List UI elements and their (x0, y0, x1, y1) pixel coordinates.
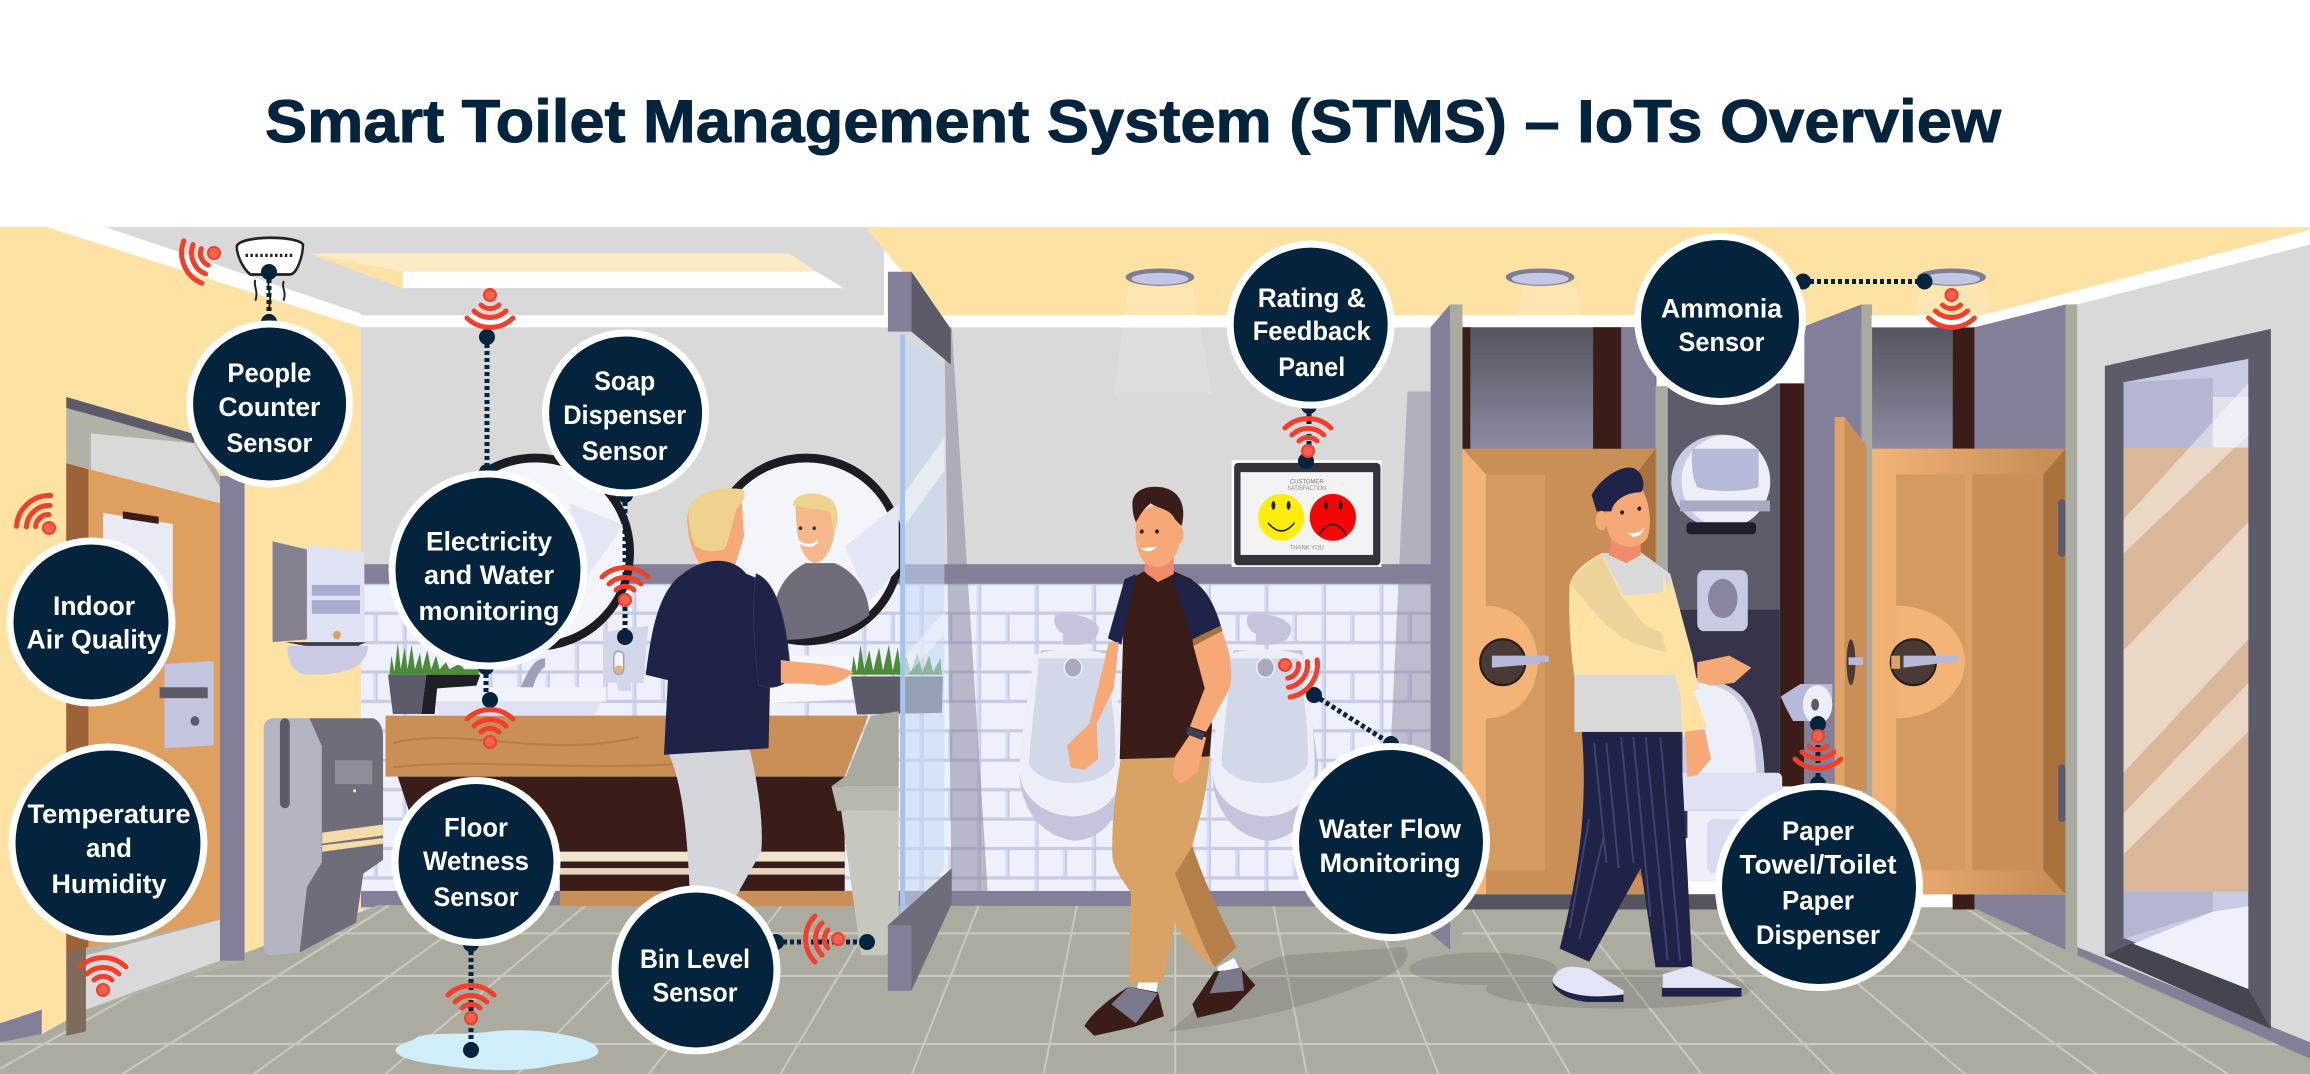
callout: people counter sensor: Sensor (226, 428, 313, 458)
callout: people counter sensor: Counter (218, 392, 321, 422)
glass exit door (2105, 329, 2271, 1029)
callout: bin level sensor: Sensor (652, 978, 738, 1008)
stall back walls (1462, 304, 2066, 950)
middle partition (1431, 304, 1462, 952)
ceiling lights (1114, 268, 2006, 408)
callout: floor wetness sensor: Wetness (423, 846, 529, 876)
counter with sinks (386, 656, 868, 906)
hand dryer bin unit (264, 718, 383, 955)
callout: temperature and humidity: Temperature (28, 799, 191, 829)
smoke detector (237, 238, 303, 307)
plants (388, 642, 943, 714)
right wall (1872, 230, 2310, 1059)
rating and feedback tablet: THANK YOU (1290, 544, 1324, 552)
wifi icon: paper dispenser (1795, 730, 1841, 768)
callout: floor wetness sensor: Sensor (434, 882, 519, 912)
rating and feedback tablet: SATISFACTION (1288, 486, 1326, 492)
paper towel dispenser on wall (273, 541, 368, 675)
callout: soap dispenser sensor (546, 333, 706, 493)
callout: ammonia sensor (1638, 236, 1802, 402)
floor (0, 905, 2310, 1074)
ceiling (0, 227, 2310, 331)
soap dispenser (603, 626, 648, 691)
wifi icon: rating panel (1285, 419, 1331, 457)
callout: electricity and water monitoring: Electricity (426, 526, 552, 556)
wifi icon: indoor air quality (10, 489, 70, 548)
sensor: ammonia connector (1795, 274, 1932, 290)
callout: water flow monitoring: Monitoring (1320, 848, 1460, 878)
callout: paper towel and toilet paper dispenser: Towel/Toilet (1740, 850, 1897, 880)
callout: electricity and water monitoring: monitoring (418, 596, 560, 626)
callout: paper towel and toilet paper dispenser: Paper (1782, 816, 1854, 846)
entrance door (66, 397, 245, 1036)
glass partition (888, 272, 952, 991)
sensor: electricity and water connectors (478, 329, 498, 708)
sensor: soap connector (617, 487, 633, 645)
restroom scene illustration (0, 227, 2310, 1074)
wifi icon: ammonia (1928, 289, 1974, 327)
title: Smart Toilet Management System (STMS) – IoTs Overview (265, 88, 2001, 155)
callout: floor wetness sensor: Floor (444, 812, 508, 842)
callout: temperature and humidity: Humidity (52, 869, 166, 899)
callout: rating and feedback panel: Panel (1278, 352, 1345, 382)
left stall handle (1480, 639, 1549, 685)
floor shadows (1169, 947, 1751, 1031)
callout: bin level sensor: Bin Level (640, 944, 750, 974)
left yellow wall (0, 227, 403, 1048)
sensor: paper dispenser connector (1810, 716, 1826, 792)
callout: temperature and humidity (12, 747, 204, 939)
callout: electricity and water monitoring (392, 474, 584, 666)
callout: indoor air quality: Indoor (53, 591, 135, 621)
walking man (1067, 487, 1255, 1036)
left mirror (441, 458, 630, 646)
callout: ammonia sensor: Ammonia (1661, 294, 1783, 324)
callout: soap dispenser sensor: Dispenser (563, 400, 687, 430)
callout: bin level sensor (615, 889, 777, 1051)
sensor: floor wetness connector (463, 936, 479, 1058)
rating and feedback tablet: CUSTOMER (1290, 478, 1324, 486)
wifi icon: floor wetness (448, 986, 494, 1024)
man by the stall (1552, 468, 1751, 1002)
wifi icon: temperature (80, 958, 126, 996)
wifi icon: bin level (806, 916, 844, 962)
callout: rating and feedback panel (1230, 244, 1391, 405)
callout: water flow monitoring: Water Flow (1319, 814, 1462, 844)
open door and partition (1781, 304, 1872, 952)
callout: temperature and humidity: and (86, 833, 132, 863)
right stall door (1872, 449, 2066, 894)
callout: rating and feedback panel: Rating & (1258, 283, 1366, 313)
callout: water flow monitoring (1296, 746, 1486, 938)
water puddle (395, 1030, 598, 1070)
bin (831, 711, 899, 955)
wifi icon: soap (602, 568, 648, 606)
callout: paper towel and toilet paper dispenser (1718, 786, 1920, 988)
callout: people counter sensor: People (227, 358, 311, 388)
sensor: bin level connector (768, 934, 875, 950)
callout: soap dispenser sensor: Soap (594, 366, 655, 396)
callout: electricity and water monitoring: and Water (424, 560, 554, 590)
sensor: rating connector (1298, 398, 1317, 469)
wifi icon: water flow (1267, 643, 1325, 703)
callout: soap dispenser sensor: Sensor (582, 436, 668, 466)
callout: indoor air quality (10, 541, 172, 703)
callout: paper towel and toilet paper dispenser: Dispenser (1756, 920, 1880, 950)
right mirror (713, 458, 900, 641)
wifi icon: electricity bottom (467, 710, 513, 748)
back wall (361, 315, 1662, 910)
sensor: people counter connector (261, 264, 277, 330)
left urinal (1020, 614, 1126, 841)
callout: indoor air quality: Air Quality (26, 624, 162, 654)
sensor: water flow connector (1306, 687, 1399, 752)
callout: paper towel and toilet paper dispenser: Paper (1782, 886, 1854, 916)
callout: rating and feedback panel: Feedback (1253, 316, 1372, 346)
wifi icon: people counter (175, 229, 229, 287)
man at the sink (646, 488, 854, 917)
callout: people counter sensor (190, 324, 350, 484)
centre stall niche with dispensers (1655, 383, 1804, 882)
right urinal (1212, 614, 1318, 841)
callout: ammonia sensor: Sensor (1678, 327, 1765, 357)
callout: floor wetness sensor (395, 780, 557, 942)
left stall door (1462, 449, 1656, 894)
rating and feedback tablet (1232, 460, 1381, 567)
wifi icon: electricity top (467, 289, 513, 327)
